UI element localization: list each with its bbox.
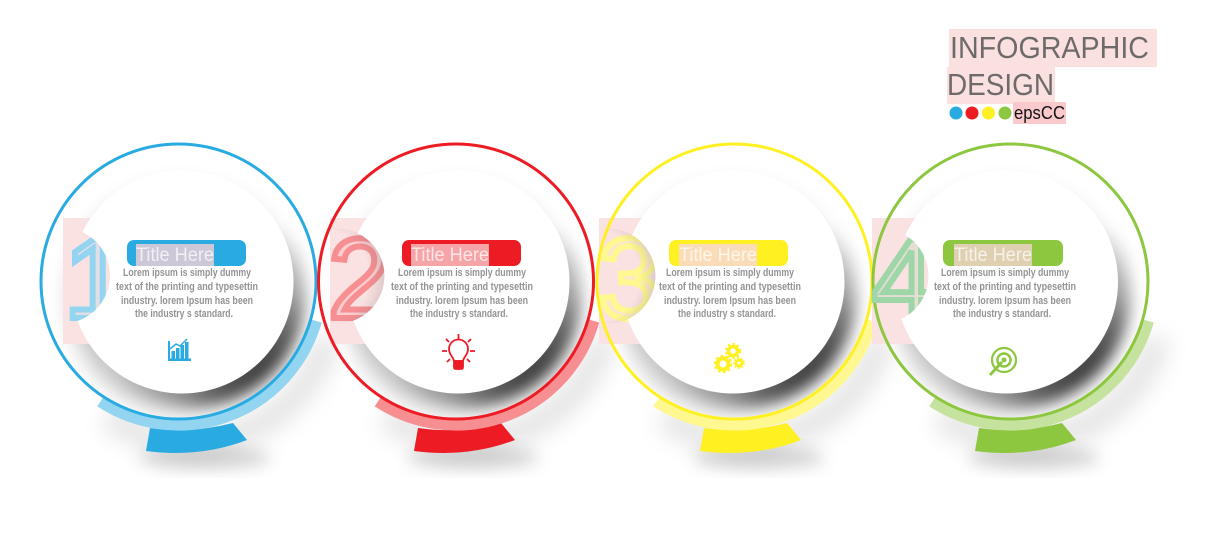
icon: gears xyxy=(715,344,744,372)
curved band xyxy=(378,321,594,425)
disc background xyxy=(874,144,1148,418)
body text: the industry s standard. xyxy=(953,308,1051,320)
title pill xyxy=(402,240,521,266)
panel: step 3 xyxy=(560,144,882,469)
body text: the industry s standard. xyxy=(678,308,776,320)
body text: Lorem ipsum is simply dummy xyxy=(666,267,795,279)
panel: step 4 xyxy=(872,144,1158,469)
white disc xyxy=(346,170,570,394)
base foot xyxy=(414,423,515,453)
base foot xyxy=(700,423,801,453)
body text: Lorem ipsum is simply dummy xyxy=(398,267,527,279)
heading text xyxy=(947,30,1149,102)
body text: the industry s standard. xyxy=(410,308,508,320)
number backdrop xyxy=(872,218,962,344)
panel shadow xyxy=(386,338,604,469)
inner shadow xyxy=(895,181,1130,411)
heading text: DESIGN xyxy=(947,67,1054,102)
base foot xyxy=(975,423,1076,453)
inner shadow xyxy=(621,181,856,411)
number backdrop xyxy=(599,218,689,344)
body text: industry. lorem Ipsum has been xyxy=(121,295,253,307)
inner shadow xyxy=(70,181,305,411)
body text xyxy=(659,267,801,320)
body text xyxy=(116,267,258,320)
title pill: Title Here xyxy=(136,245,214,266)
curved band xyxy=(932,321,1148,425)
panel shadow xyxy=(108,338,328,469)
body text: text of the printing and typesettin xyxy=(934,281,1076,293)
number 4: 4 xyxy=(872,216,935,343)
panel shadow xyxy=(664,338,882,469)
number bite shading xyxy=(614,229,656,323)
body text: the industry s standard. xyxy=(135,308,233,320)
body text: industry. lorem Ipsum has been xyxy=(396,295,528,307)
number 2: 2 xyxy=(328,216,391,343)
title pill xyxy=(669,240,788,266)
body text xyxy=(934,267,1076,320)
panel: step 2 xyxy=(290,144,604,469)
outer ring xyxy=(41,144,316,419)
title pill xyxy=(127,240,246,266)
title pill: Title Here xyxy=(954,245,1032,266)
icon: target xyxy=(990,348,1016,375)
outer ring xyxy=(318,144,594,419)
title pill: Title Here xyxy=(411,245,489,266)
body text: Lorem ipsum is simply dummy xyxy=(941,267,1070,279)
outer ring xyxy=(873,144,1148,419)
body text: industry. lorem Ipsum has been xyxy=(939,295,1071,307)
number 3: 3 xyxy=(598,216,661,343)
base foot xyxy=(146,423,247,453)
white disc xyxy=(895,170,1118,394)
body text: text of the printing and typesettin xyxy=(659,281,801,293)
curved band xyxy=(100,321,316,425)
title pill xyxy=(943,240,1063,266)
curved band xyxy=(656,321,872,425)
white disc xyxy=(622,170,844,394)
title xyxy=(947,29,1157,124)
number bite shading xyxy=(342,229,384,323)
outer ring xyxy=(597,144,872,419)
body text xyxy=(391,267,533,320)
disc background xyxy=(598,144,872,418)
epsCC label: epsCC xyxy=(1014,103,1065,123)
colour dots xyxy=(950,106,1012,120)
heading text: INFOGRAPHIC xyxy=(950,30,1149,65)
body text: text of the printing and typesettin xyxy=(391,281,533,293)
body text: industry. lorem Ipsum has been xyxy=(664,295,796,307)
panel: step 1 xyxy=(41,144,328,469)
number backdrop xyxy=(330,218,420,344)
icon: light bulb xyxy=(442,334,475,369)
panel shadow xyxy=(940,338,1158,469)
white disc xyxy=(70,170,294,394)
title pill: Title Here xyxy=(679,245,757,266)
heading highlight xyxy=(947,29,1157,104)
body text: Lorem ipsum is simply dummy xyxy=(123,267,252,279)
disc background xyxy=(319,144,593,418)
inner shadow xyxy=(346,181,581,411)
number backdrop xyxy=(63,218,153,344)
disc background xyxy=(42,144,316,418)
body text: text of the printing and typesettin xyxy=(116,281,258,293)
icon: bar chart xyxy=(168,339,191,361)
number 1: 1 xyxy=(64,216,127,343)
